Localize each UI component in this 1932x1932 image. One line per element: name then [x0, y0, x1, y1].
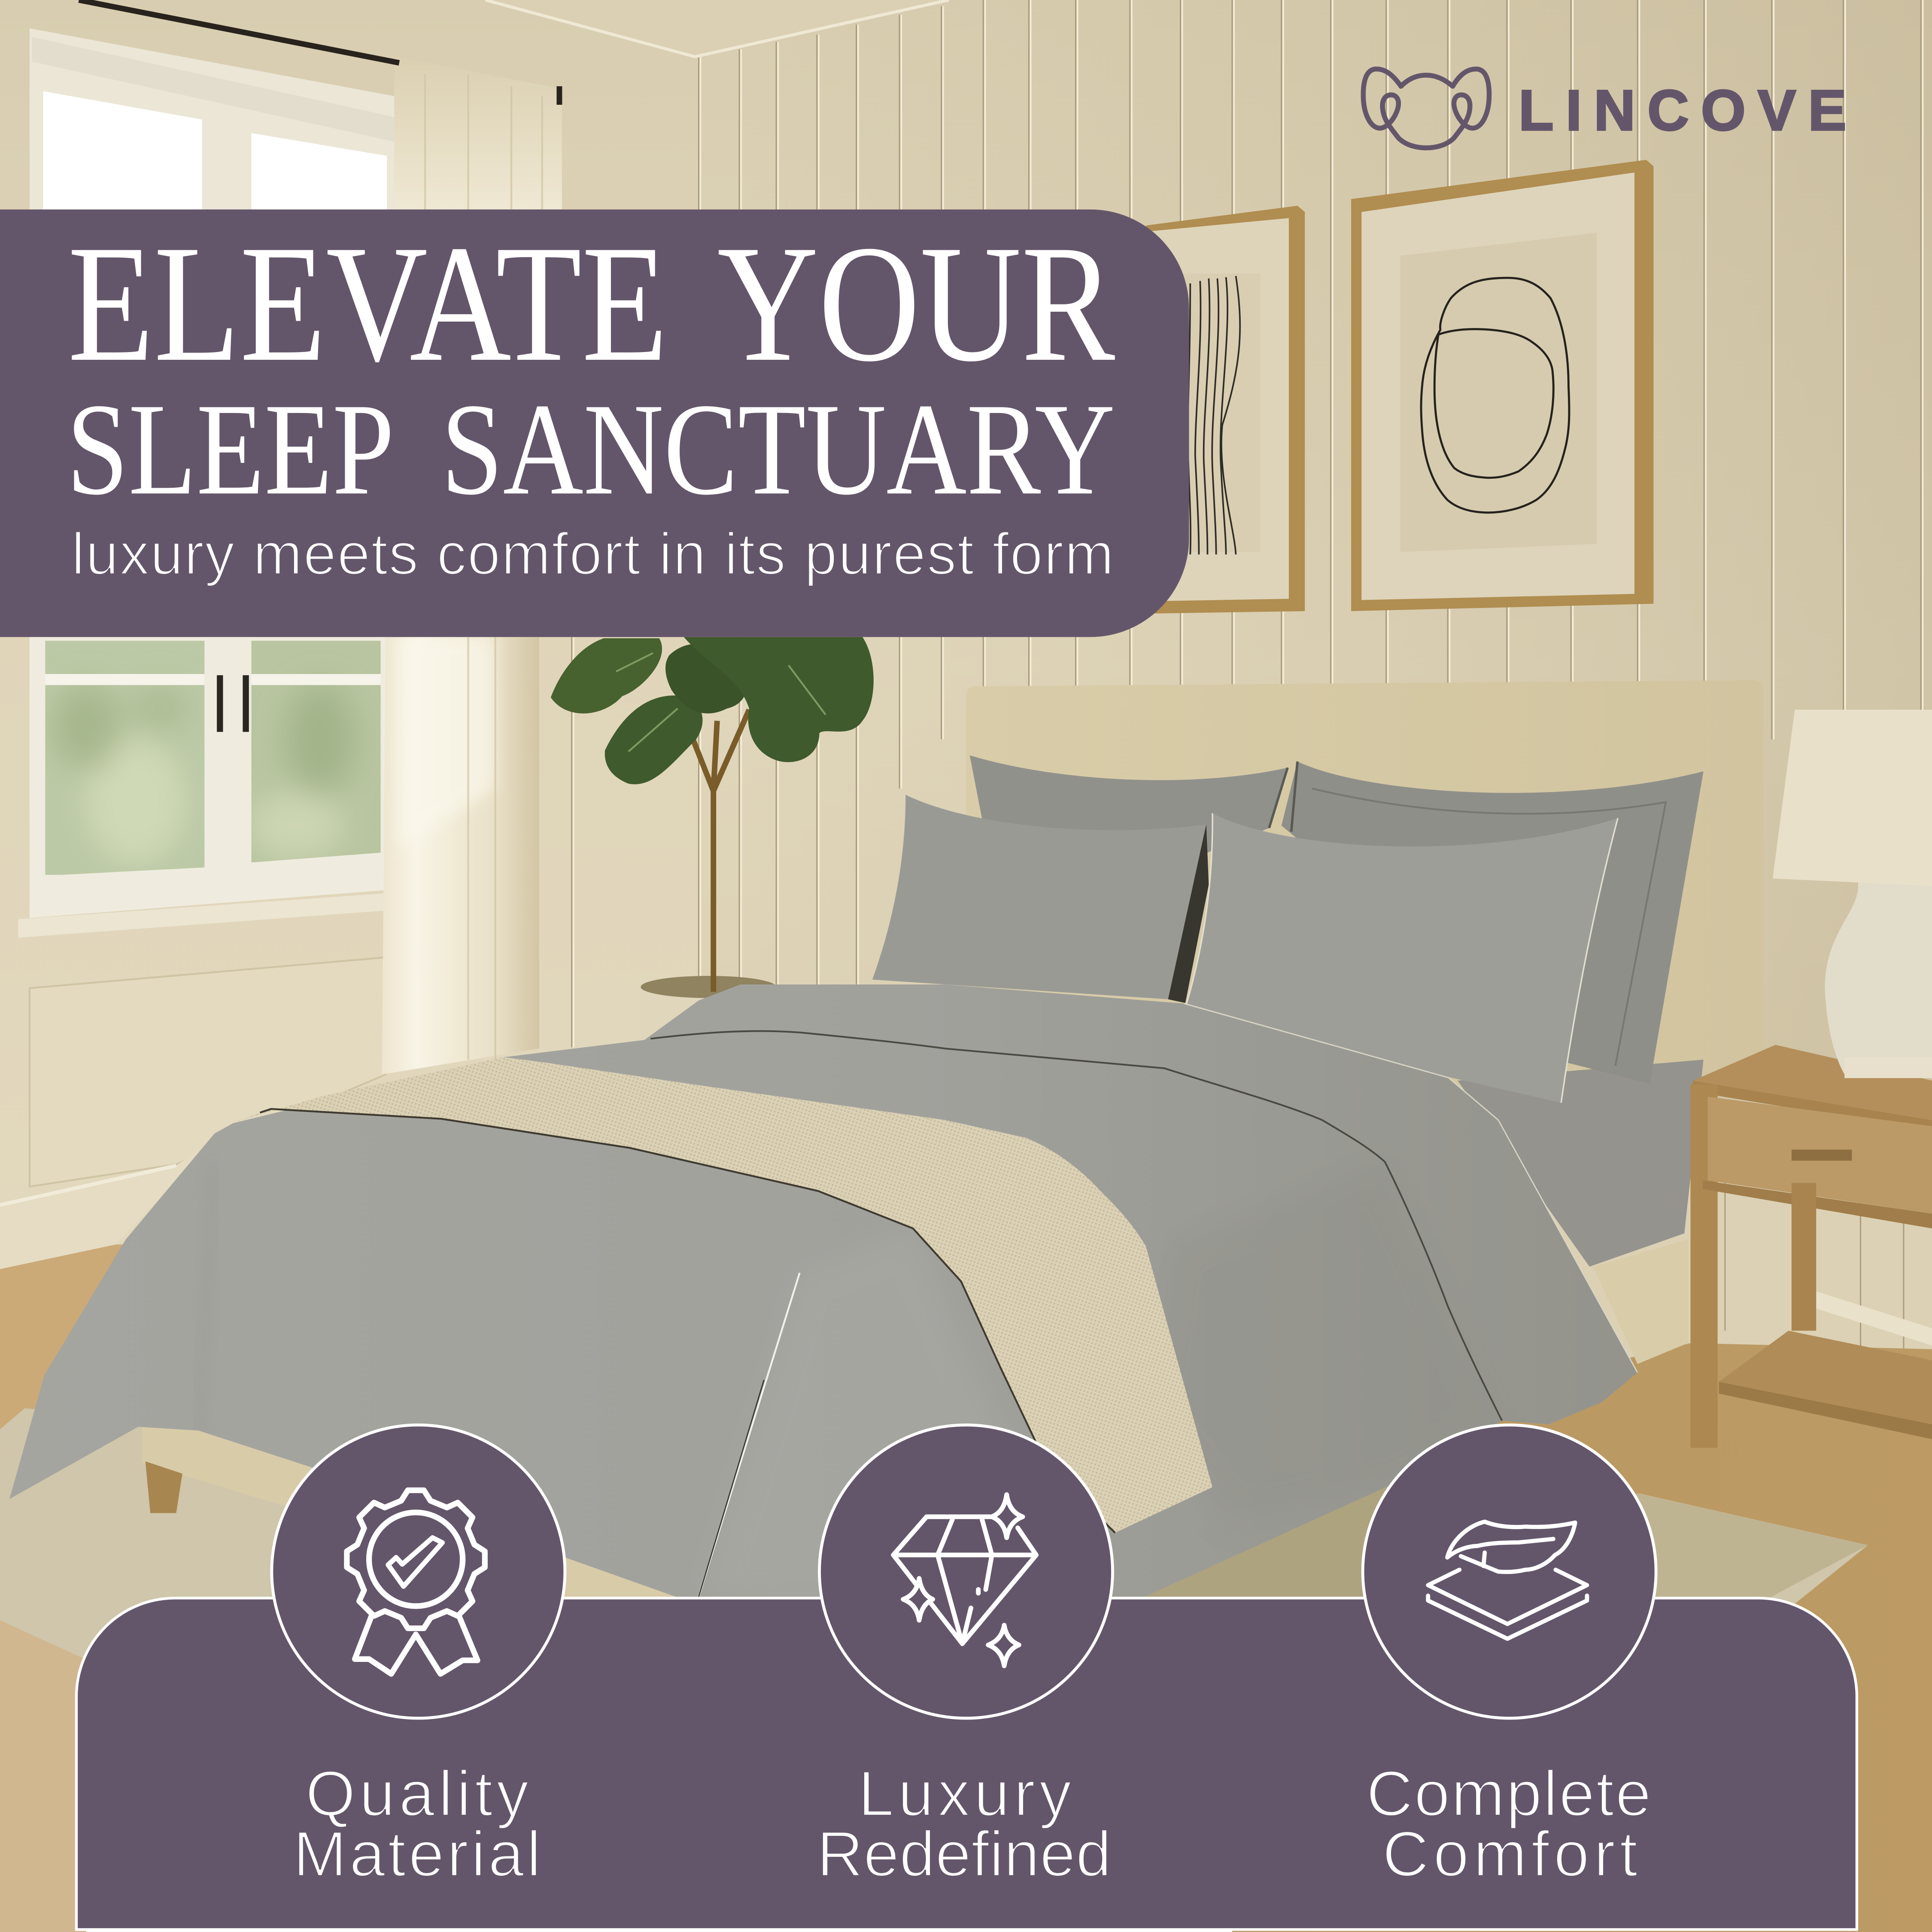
- wall art left frame: [1146, 206, 1305, 614]
- right panelled wall: [486, 0, 1932, 1368]
- label: quality material: Quality: [306, 1758, 529, 1829]
- floor: [0, 1245, 1932, 1932]
- nightstand: [1691, 1045, 1932, 1448]
- label: luxury redefined: Luxury: [858, 1758, 1072, 1829]
- throw blanket runner: [233, 1057, 1212, 1533]
- heading line 1: [68, 211, 1116, 396]
- subtitle: luxury meets comfort in its purest form: [71, 521, 1114, 587]
- label: luxury redefined: [817, 1758, 1112, 1889]
- icon: diamond: [819, 1425, 1113, 1718]
- icon: medal: [272, 1425, 565, 1718]
- heading line 1: ELEVATE: [68, 211, 668, 396]
- window: [0, 28, 394, 1269]
- plant: [551, 637, 874, 1047]
- heading line 2: SANCTUARY: [441, 376, 1115, 522]
- heading line 1: YOUR: [717, 211, 1116, 396]
- label: complete comfort: Complete: [1367, 1758, 1651, 1829]
- headboard: [966, 680, 1763, 1091]
- heading line 2: [67, 376, 1115, 522]
- rug: [0, 1408, 1868, 1660]
- label: luxury redefined: Redefined: [817, 1818, 1112, 1889]
- label: quality material: [293, 1758, 541, 1889]
- left wall: [0, 0, 697, 1282]
- benefit: complete comfort: [1363, 1425, 1656, 1889]
- logo wordmark: LINCOVE: [1519, 79, 1847, 143]
- benefit: luxury redefined: [817, 1425, 1113, 1889]
- curtain rod: [79, 0, 559, 105]
- label: complete comfort: [1367, 1758, 1651, 1889]
- icon: feather and layers: [1363, 1425, 1656, 1718]
- wall art right frame: [1351, 160, 1653, 611]
- label: complete comfort: Comfort: [1382, 1818, 1637, 1889]
- front pillows: [872, 795, 1618, 1103]
- logo mark: [1363, 69, 1489, 148]
- heading line 2: SLEEP: [67, 376, 394, 522]
- panel: benefits: [76, 1425, 1857, 1929]
- duvet: [9, 984, 1637, 1602]
- logo: [1363, 69, 1847, 148]
- curtain: [382, 57, 562, 1075]
- table lamp: [1773, 710, 1932, 1078]
- benefit: quality material: [272, 1425, 565, 1889]
- label: quality material: Material: [293, 1818, 541, 1889]
- bed frame: [142, 1060, 1704, 1614]
- panel: title banner: [0, 210, 1189, 637]
- back pillows: [970, 755, 1704, 1084]
